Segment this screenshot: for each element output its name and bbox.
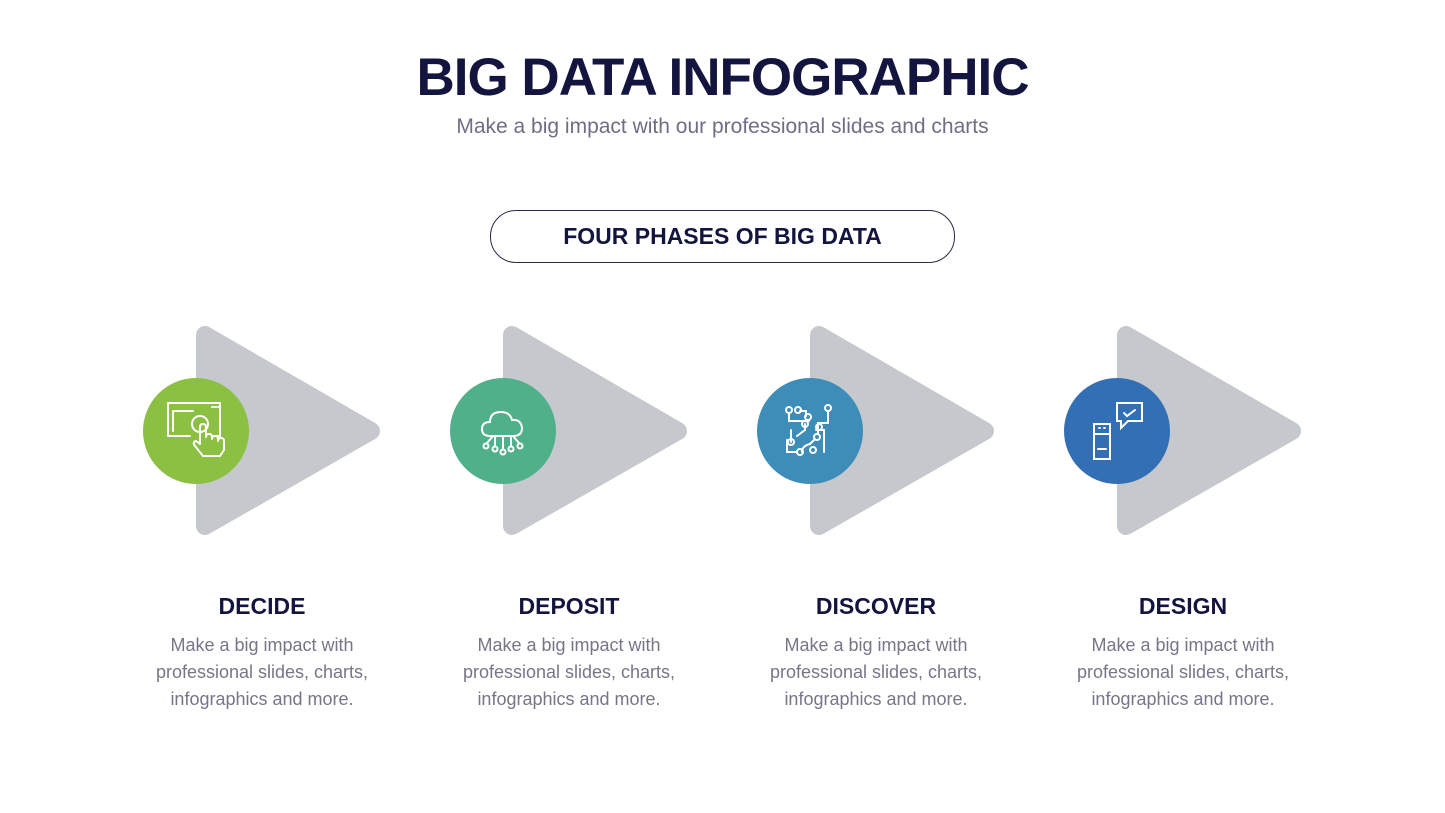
phase 3 shape — [757, 335, 985, 526]
phase 4 shape — [1064, 335, 1292, 526]
text: Make a big impact with professional slides, charts, infographics and more. — [463, 635, 675, 709]
phase 2 text — [463, 593, 675, 709]
text: DEPOSIT — [519, 593, 619, 619]
text: DISCOVER — [816, 593, 936, 619]
pill label — [490, 210, 955, 263]
phase 1 text — [156, 593, 368, 709]
text: Make a big impact with professional slides, charts, infographics and more. — [1077, 635, 1289, 709]
subtitle: Make a big impact with our professional slides and charts — [456, 115, 989, 138]
text: Make a big impact with professional slides, charts, infographics and more. — [156, 635, 368, 709]
phase 4 text — [1077, 593, 1289, 709]
phase 1 shape — [143, 335, 371, 526]
text: DECIDE — [219, 593, 305, 619]
title: BIG DATA INFOGRAPHIC — [416, 48, 1029, 107]
phase 2 shape — [450, 335, 678, 526]
text: DESIGN — [1139, 593, 1227, 619]
text: Make a big impact with professional slides, charts, infographics and more. — [770, 635, 982, 709]
phase 3 text — [770, 593, 982, 709]
pill label: FOUR PHASES OF BIG DATA — [563, 223, 882, 249]
